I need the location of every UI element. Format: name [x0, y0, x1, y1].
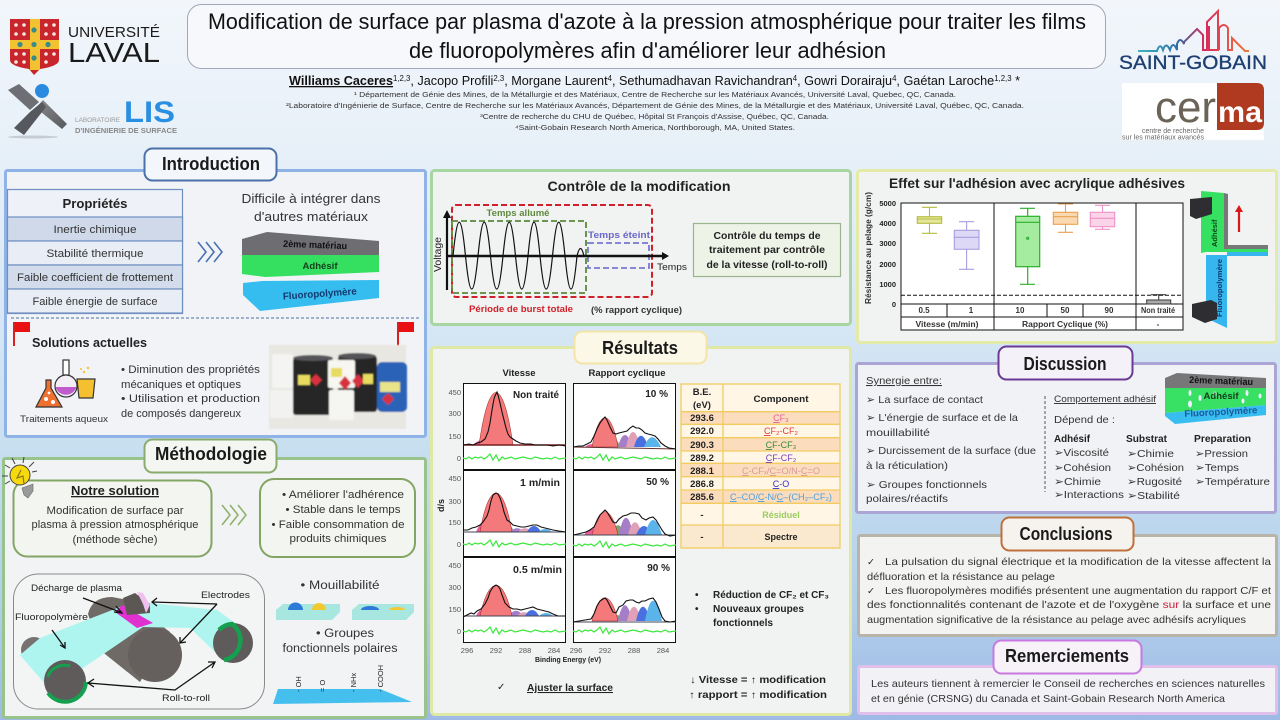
y axis labels: 450 [448, 561, 461, 570]
wettability [276, 580, 414, 620]
logo: Université Laval: UNIVERSITÉ [68, 24, 160, 41]
box plot chart: Rapport Cyclique (%) [1022, 320, 1108, 329]
heading: results [574, 332, 706, 364]
box plot chart: 3000 [879, 239, 896, 248]
box plot chart: 1 [969, 306, 974, 315]
y axis labels: 300 [448, 497, 461, 506]
box plot chart [863, 192, 1183, 330]
polar functional groups: fonctionnels polaires [282, 643, 398, 655]
chart: XPS vitesse 0.5 m/min: 0.5 m/min [513, 565, 562, 576]
affiliations: ⁴Saint-Gobain Research North America, Northborough, MA, United States. [515, 125, 795, 132]
polar functional groups: • Groupes [316, 628, 374, 640]
column heading: vitesse: Vitesse [502, 368, 536, 379]
column: adhésif: Adhésif [1054, 433, 1090, 445]
component table: 285.6 [690, 492, 714, 503]
panel: control of modification [432, 170, 850, 324]
material stack illustration: Adhésif [302, 261, 338, 272]
box plot chart: 0.5 [918, 306, 930, 315]
logo: LIS laboratoire [8, 84, 177, 138]
relationship summary: ↓ Vitesse = ↑ modification [690, 675, 826, 686]
y axis labels: 150 [448, 605, 461, 614]
logo: Cerma [1122, 83, 1264, 142]
film band [20, 603, 242, 684]
material stack illustration [242, 232, 379, 311]
polar functional groups [273, 628, 412, 704]
heading: conclusions [1002, 518, 1134, 550]
component table: 290.3 [690, 440, 714, 451]
left roll rear cap [21, 637, 47, 663]
properties table: Faible coefficient de frottement [17, 272, 173, 284]
adhesion stack illustration: 2ème matériau [1189, 375, 1253, 388]
column: adhésif: ➢Interactions [1054, 489, 1124, 501]
logo: LIS laboratoire: LABORATOIRE [75, 118, 120, 124]
heading: conclusions: Conclusions [1020, 524, 1112, 544]
component table: C-CFₓ/C=O/N-C=O [742, 466, 820, 476]
arrow: chevrons [198, 242, 222, 262]
component table: CF-CF₃ [766, 440, 797, 450]
speed control box [694, 224, 840, 276]
logo: Cerma: sur les matériaux avancés [1122, 132, 1204, 142]
electrode [123, 592, 150, 615]
roll-to-roll diagram: Décharge de plasma [31, 583, 122, 593]
benefits box: • Stable dans le temps [286, 504, 401, 516]
heading: current solutions: Solutions actuelles [32, 336, 147, 350]
benefits box: • Faible consommation de [272, 519, 404, 531]
panel heading: Contrôle de la modification [548, 179, 730, 194]
roll-to-roll diagram [14, 574, 264, 709]
roll-to-roll diagram: Roll-to-roll [162, 693, 210, 703]
acknowledgement text: Les auteurs tiennent à remercier le Conseil de recherches en sciences naturelles [871, 678, 1265, 690]
component table: - [700, 532, 704, 543]
box plot chart: 4000 [879, 219, 896, 228]
adhesive behaviour: Comportement adhésif [1054, 394, 1156, 405]
solution box: Notre solution [71, 483, 159, 498]
y axis labels: 0 [457, 454, 461, 463]
x axis labels: 288 [628, 646, 640, 655]
conclusion text: des fonctionnalités contenant de l'azote et de l'oxygène sur la surface et une [867, 599, 1271, 611]
conclusion text: augmentation significative de la résistance au pelage avec adhésifs acryliques [867, 614, 1246, 626]
chart: XPS rapport 90 %: 90 % [647, 563, 670, 574]
benefits box [260, 479, 415, 557]
conclusion text: ✓ [867, 586, 875, 597]
key findings: Nouveaux groupes [713, 604, 804, 615]
chart: XPS rapport 90 % [573, 558, 676, 642]
logo: Cerma: centre de recherche [1142, 126, 1204, 135]
peel test illustration: Fluoropolymère [1215, 259, 1224, 317]
y axis labels: 150 [448, 432, 461, 441]
adhesive behaviour: Dépend de : [1054, 414, 1115, 426]
synergy list: ➢ L'énergie de surface et de la [866, 412, 1018, 424]
polar functional groups: - OH [294, 676, 303, 692]
column: adhésif: ➢Cohésion [1054, 462, 1111, 474]
box: 90 % [1090, 205, 1115, 229]
box: non traité [1147, 295, 1171, 304]
logo: LIS laboratoire: D'INGÉNIERIE DE SURFACE [75, 126, 177, 135]
y axis labels: 300 [448, 409, 461, 418]
benefits box: produits chimiques [290, 533, 387, 545]
panel: discussion [856, 346, 1276, 512]
right roll [213, 623, 253, 663]
y axis labels [448, 388, 461, 636]
affiliations [286, 92, 1024, 132]
column: adhésif: ➢Chimie [1054, 476, 1101, 488]
logo: Saint-Gobain [1119, 11, 1267, 74]
box: 10 % [1016, 208, 1040, 284]
central roller back [88, 597, 170, 682]
properties table [8, 190, 182, 314]
component table: 292.0 [690, 426, 714, 437]
text: difficult to integrate: d'autres matériaux [254, 209, 369, 224]
column: preparation: ➢Pression [1195, 448, 1248, 460]
conclusion text: ✓ [867, 557, 875, 568]
polar functional groups: - NHx [349, 673, 358, 692]
polar functional groups: = O [318, 680, 327, 692]
waveform diagram: (% rapport cyclique) [591, 305, 682, 316]
y axis title: d/s [436, 499, 446, 512]
box: 1 m/min [954, 222, 979, 269]
speed control box: Contrôle du temps de [714, 230, 821, 242]
check item: fit surface: ✓ [497, 682, 505, 693]
speed control box: traitement par contrôle [709, 244, 825, 256]
title [188, 4, 1106, 68]
chart: XPS rapport 10 %: 10 % [645, 389, 668, 400]
text: drawbacks: de composés dangereux [121, 408, 241, 420]
central roller front [128, 628, 182, 682]
solution box: Modification de surface par [46, 505, 184, 517]
properties table: Inertie chimique [54, 224, 136, 236]
arrow: chevrons [222, 505, 246, 525]
check item: fit surface: Ajuster la surface [527, 682, 613, 694]
synergy list: ➢ Groupes fonctionnels [866, 479, 987, 491]
chart: XPS vitesse 0.5 m/min [463, 558, 566, 642]
acknowledgement text [871, 678, 1265, 705]
relationship summary: ↑ rapport = ↑ modification [689, 690, 827, 701]
y axis labels: 450 [448, 388, 461, 397]
waveform diagram: Temps allumé [486, 208, 550, 219]
box plot chart: Vitesse (m/min) [916, 320, 979, 329]
text: drawbacks: • Diminution des propriétés [121, 364, 261, 376]
logo: Cerma: cer [1155, 83, 1216, 132]
component table: 288.1 [690, 466, 715, 477]
box plot chart: 0 [892, 300, 896, 309]
y axis labels: 150 [448, 518, 461, 527]
solution box [14, 480, 212, 556]
component table: - [700, 510, 704, 521]
synergy list: ➢ La surface de contact [866, 394, 983, 406]
component table: B.E. [693, 387, 711, 398]
heading: discussion: Discussion [1024, 354, 1106, 374]
heading: methodology [144, 440, 276, 472]
component table: CF₃ [773, 413, 789, 423]
x axis labels [461, 646, 669, 655]
icon: right flag [397, 322, 414, 346]
title: de fluoropolymères afin d'améliorer leur adhésion [409, 38, 886, 63]
box: 50 % [1053, 204, 1078, 232]
chart: XPS vitesse non traité [463, 384, 566, 470]
box plot chart: 2000 [879, 260, 896, 269]
column: substrat: Substrat [1126, 433, 1167, 445]
heading: introduction [144, 148, 276, 180]
column: substrat: ➢Cohésion [1127, 462, 1184, 474]
component table: Résiduel [762, 510, 800, 520]
waveform diagram: Période de burst totale [469, 304, 573, 315]
component table: 293.6 [690, 413, 714, 424]
logo: Université Laval: LAVAL [68, 37, 160, 68]
component table: Spectre [764, 532, 798, 542]
properties table: Stabilité thermique [46, 248, 144, 260]
conclusion text: Les fluoropolymères modifiés présentent une augmentation du rapport C/F et [885, 585, 1271, 597]
text: drawbacks: mécaniques et optiques [121, 379, 242, 391]
column: preparation: Preparation [1194, 433, 1251, 445]
heading: results: Résultats [602, 338, 678, 358]
plasma discharge [115, 605, 153, 628]
box plot chart: 90 [1105, 306, 1114, 315]
box plot chart: 1000 [879, 280, 896, 289]
y axis labels: 450 [448, 474, 461, 483]
x axis labels: 296 [570, 646, 582, 655]
relationship summary [689, 675, 827, 701]
adhesion stack illustration: Fluoropolymère [1184, 405, 1258, 420]
adhesion stack illustration [1165, 373, 1266, 424]
component table: C-O [773, 479, 789, 489]
speed control box: de la vitesse (roll-to-roll) [706, 259, 828, 271]
affiliations: ³Centre de recherche du CHU de Québec, Hôpital St François d'Assise, Québec, QC, Canada. [480, 114, 829, 121]
waveform diagram [433, 205, 687, 316]
wettability: • Mouillabilité [300, 580, 380, 592]
column: substrat: ➢Chimie [1127, 448, 1174, 460]
synergy list: polaires/réactifs [866, 493, 948, 505]
conclusion text [867, 556, 1271, 626]
logo: LIS laboratoire: LIS [124, 96, 175, 129]
box plot chart: 10 [1016, 306, 1025, 315]
key findings: • [695, 604, 699, 615]
x axis labels: 284 [548, 646, 560, 655]
left roll [44, 660, 86, 702]
box: 0.5 m/min [917, 207, 942, 233]
heading: acknowledgements: Remerciements [1005, 646, 1129, 666]
box plot chart: 5000 [879, 199, 896, 208]
adhesive behaviour [1054, 394, 1156, 426]
component table: (eV) [693, 400, 711, 411]
key findings: fonctionnels [713, 618, 773, 629]
x axis labels: 296 [461, 646, 473, 655]
component table: CF-CF₂ [766, 453, 797, 463]
arrows [52, 598, 217, 690]
component table [681, 384, 840, 548]
polar functional groups: - COOH [376, 665, 385, 692]
column: substrat [1126, 433, 1184, 502]
affiliations: ²Laboratoire d'Ingénierie de Surface, Centre de Recherche sur les Matériaux Avancés, Département de Génie des Mines, de la Métallurgie et des Matériaux, Université Laval, Québec, QC, Canada. [286, 103, 1024, 110]
adhesion stack illustration: Adhésif [1204, 391, 1239, 402]
heading: introduction: Introduction [162, 154, 260, 174]
column: preparation: ➢Temps [1195, 462, 1239, 474]
column: adhésif [1054, 433, 1124, 501]
box plot chart: Résistance au pelage (g/cm) [863, 192, 873, 304]
x axis labels: 292 [490, 646, 502, 655]
chart: XPS rapport 10 % [573, 384, 676, 470]
waveform diagram: Temps éteint [588, 230, 651, 241]
x axis labels: 288 [519, 646, 531, 655]
box plot chart: Non traité [1141, 306, 1175, 315]
text: drawbacks: • Utilisation et production [121, 393, 260, 405]
waveform diagram: Voltage [433, 237, 444, 272]
synergy list: mouillabilité [866, 427, 930, 439]
box plot chart: - [1157, 320, 1160, 329]
authors: Williams Caceres1,2,3, Jacopo Profili2,3, Morgane Laurent4, Sethumadhavan Ravichandran4, Gowri Dorairaju4, Gaétan Laroche1,2,3 * [289, 73, 1020, 88]
logo: Cerma: ma [1218, 96, 1262, 129]
logo: Université Laval [10, 19, 160, 75]
x axis labels: 284 [657, 646, 669, 655]
column heading: rapport cyclique: Rapport cyclique [588, 368, 666, 379]
chart: XPS vitesse 1 m/min: 1 m/min [520, 478, 560, 489]
column: preparation: ➢Température [1195, 476, 1270, 488]
properties table: Faible énergie de surface [32, 296, 158, 308]
component table: 286.8 [690, 479, 714, 490]
panel: adhesion effect [858, 170, 1276, 342]
panel: introduction [6, 148, 426, 436]
icon: chemistry flasks [36, 360, 95, 407]
solution box: plasma à pression atmosphérique [32, 519, 198, 531]
solution box: (méthode sèche) [72, 534, 158, 546]
component table: Component [754, 394, 809, 405]
chart: XPS rapport 50 %: 50 % [646, 477, 669, 488]
column: adhésif: ➢Viscosité [1054, 447, 1109, 459]
synergy list [866, 375, 1036, 505]
text: drawbacks [121, 364, 261, 420]
synergy list: ➢ Durcissement de la surface (due [866, 445, 1036, 457]
key findings: Réduction de CF₂ et CF₃ [713, 590, 829, 601]
synergy list: à la réticulation) [866, 460, 948, 472]
properties table: Propriétés [62, 196, 128, 211]
column: preparation [1194, 433, 1270, 488]
component table: CF₂-CF₂ [764, 426, 798, 436]
y axis labels: 0 [457, 540, 461, 549]
x axis labels: 292 [599, 646, 611, 655]
y axis labels: 300 [448, 583, 461, 592]
column: substrat: ➢Stabilité [1127, 490, 1180, 502]
column: substrat: ➢Rugosité [1127, 476, 1182, 488]
waveform diagram: Temps [657, 262, 687, 273]
box plot chart: 50 [1061, 306, 1070, 315]
roll-to-roll diagram: Fluoropolymère [15, 612, 88, 622]
panel: acknowledgements [858, 640, 1276, 714]
y axis labels: 0 [457, 627, 461, 636]
icon: light bulb [2, 457, 37, 498]
heading: acknowledgements [994, 640, 1142, 674]
synergy list: Synergie entre: [866, 375, 942, 387]
conclusion text: La pulsation du signal électrique et la modification de la vitesse affectent la [885, 556, 1271, 568]
chart: XPS vitesse 1 m/min [463, 470, 566, 556]
text: difficult to integrate [242, 191, 381, 224]
panel: methodology [2, 440, 426, 718]
material stack illustration: Fluoropolymère [283, 286, 358, 303]
icon caption: Traitements aqueux [20, 414, 108, 425]
x axis title: Binding Energy (eV) [535, 655, 601, 664]
peel test illustration: Adhésif [1210, 219, 1219, 247]
chart: XPS rapport 50 % [573, 470, 676, 556]
key findings [695, 590, 829, 629]
icon: left flag [13, 322, 30, 346]
logo: Saint-Gobain: SAINT-GOBAIN [1119, 53, 1267, 74]
conclusion text: défluoration et la résistance au pelage [867, 571, 1055, 583]
acknowledgement text: et en génie (CRSNG) du Canada et Saint-Gobain Research North America [871, 693, 1225, 705]
material stack illustration: 2ème matériau [283, 239, 347, 252]
heading: methodology: Méthodologie [155, 444, 267, 464]
chart: XPS vitesse non traité: Non traité [513, 390, 559, 401]
peel test illustration [1190, 191, 1268, 328]
title: Modification de surface par plasma d'azote à la pression atmosphérique pour traiter les films [208, 9, 1086, 34]
key findings: • [695, 590, 699, 601]
panel: results [432, 332, 850, 714]
component table: C–CO/C-N/C–(CH₂–CF₂) [730, 492, 832, 502]
benefits box: • Améliorer l'adhérence [282, 489, 404, 501]
component table: 289.2 [690, 453, 714, 464]
photo: chemical barrels [269, 345, 407, 429]
panel: conclusions [858, 518, 1276, 636]
panel heading: Effet sur l'adhésion avec acrylique adhésives [889, 175, 1185, 191]
text: difficult to integrate: Difficile à intégrer dans [242, 191, 381, 206]
roll-to-roll diagram: Electrodes [201, 590, 251, 600]
affiliations: ¹ Département de Génie des Mines, de la Métallurgie et des Matériaux, Centre de Recherche sur les Matériaux Avancés, Université Laval, Quebec, QC, Canada. [354, 92, 956, 99]
heading: discussion [998, 346, 1132, 380]
